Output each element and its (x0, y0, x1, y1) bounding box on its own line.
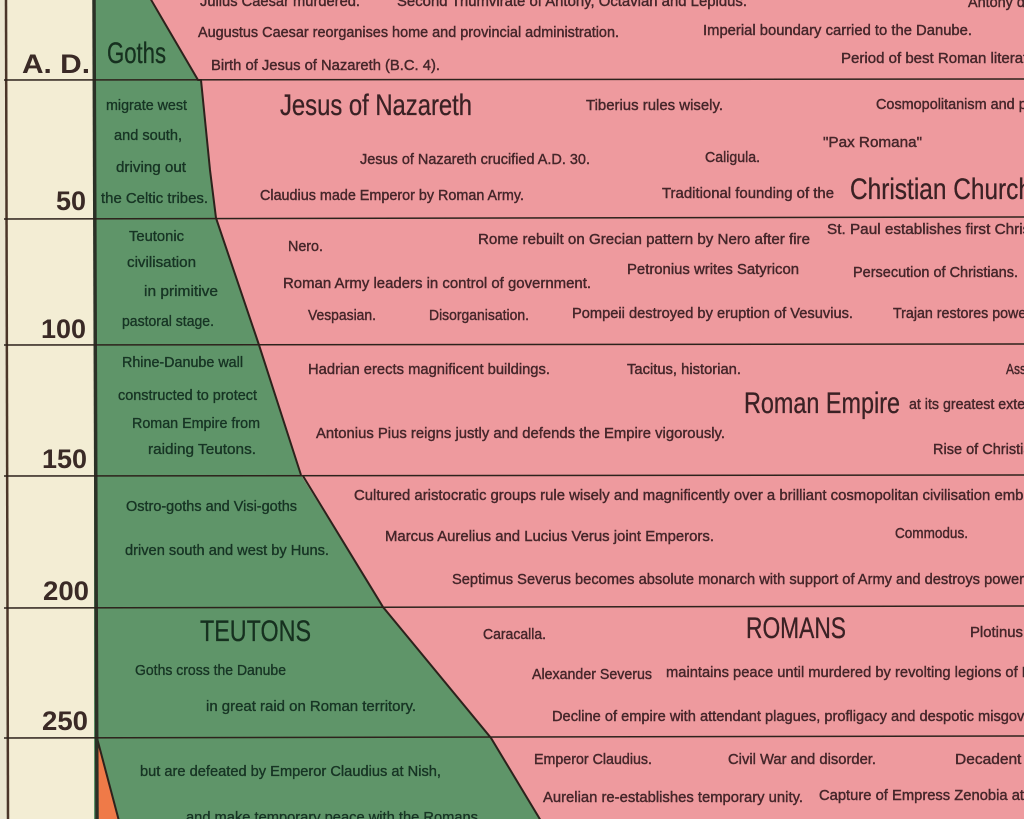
text block: Teutons events: the Celtic tribes. (101, 191, 208, 207)
text block: Teutons events: pastoral stage. (122, 314, 214, 330)
year axis labels: 100 (41, 314, 86, 344)
text block: Romans events: Rome rebuilt on Grecian pattern by Nero after fire (478, 232, 810, 248)
text block: Romans events: Persecution of Christians. (853, 265, 1018, 281)
text block: Romans events: Traditional founding of the (662, 186, 834, 202)
heading: Roman Empire: Roman Empire (744, 387, 900, 420)
text block: Teutons events: Ostro-goths and Visi-goths (126, 499, 297, 515)
text block: Teutons events: in primitive (144, 284, 218, 300)
year axis labels: A. D. (22, 49, 90, 79)
text block: Teutons events: Rhine-Danube wall (122, 355, 243, 371)
text block: Romans events: Pompeii destroyed by eruption of Vesuvius. (572, 306, 853, 322)
text block: Romans events: Birth of Jesus of Nazareth (B.C. 4). (211, 58, 440, 74)
text block: Romans events: Antonius Pius reigns justly and defends the Empire vigorously. (316, 426, 725, 442)
text block: Romans events: Plotinus (970, 625, 1023, 641)
text block: Teutons events: in great raid on Roman territory. (206, 699, 416, 715)
panel: timeline column (0, 0, 94, 819)
text block: Romans events: Claudius made Emperor by Roman Army. (260, 188, 524, 204)
text block: Romans events (198, 0, 1024, 806)
text block: Teutons events: constructed to protect (118, 388, 257, 404)
text block: Teutons events: raiding Teutons. (148, 442, 256, 458)
text block: Romans events: Jesus of Nazareth crucified A.D. 30. (360, 152, 590, 168)
panel: Teutons band (94, 0, 541, 819)
heading: Jesus of Nazareth: Jesus of Nazareth (280, 89, 472, 122)
year axis labels (22, 49, 90, 736)
text block: Romans events: Roman Army leaders in control of government. (283, 276, 591, 292)
heading: ROMANS: ROMANS (746, 612, 846, 645)
text block: Romans events: Septimus Severus becomes absolute monarch with support of Army and destroys power (452, 572, 1024, 588)
text block: Romans events: Imperial boundary carried to the Danube. (703, 23, 972, 39)
text block: Romans events: Civil War and disorder. (728, 752, 876, 768)
text block: Teutons events: driven south and west by Huns. (125, 543, 329, 559)
text block: Romans events: Augustus Caesar reorganises home and provincial administration. (198, 25, 619, 41)
text block: Teutons events: Teutonic (129, 229, 184, 245)
heading: TEUTONS: TEUTONS (200, 615, 311, 648)
text block: Romans events: Disorganisation. (429, 308, 529, 324)
text block: Romans events: Alexander Severus (532, 667, 652, 683)
text block: Romans events: Commodus. (895, 526, 968, 542)
text block: Teutons events: but are defeated by Emperor Claudius at Nish, (140, 764, 441, 780)
heading: Goths: Goths (107, 37, 166, 70)
text block: Romans events: Petronius writes Satyricon (627, 262, 799, 278)
year axis labels: 250 (42, 706, 88, 736)
text block: Romans events: Aurelian re-establishes temporary unity. (543, 790, 803, 806)
text block: Romans events: Caligula. (705, 150, 760, 166)
text block: Romans events: Tacitus, historian. (627, 362, 741, 378)
text block: Romans events: Marcus Aurelius and Lucius Verus joint Emperors. (385, 529, 714, 545)
text block: Teutons events (101, 98, 478, 819)
text block: Romans events: Hadrian erects magnificent buildings. (308, 362, 550, 378)
panel: Huns orange wedge (97, 740, 119, 819)
text block: Romans events: Caracalla. (483, 627, 546, 643)
text block: Teutons events: driving out (116, 160, 186, 176)
year axis labels: 150 (42, 444, 87, 474)
text block: Teutons events: Goths cross the Danube (135, 663, 286, 679)
text block: Romans events: "Pax Romana" (823, 135, 922, 151)
text block: Romans events: Emperor Claudius. (534, 752, 652, 768)
text block: Romans events: Nero. (288, 239, 323, 255)
text block: Romans events: Tiberius rules wisely. (586, 98, 723, 114)
text block: Teutons events: migrate west (106, 98, 187, 114)
text block: Romans events: Capture of Empress Zenobia at (819, 788, 1024, 804)
year axis labels: 200 (43, 576, 89, 606)
text block: Teutons events: civilisation (127, 255, 196, 271)
text block: Teutons events: Roman Empire from (132, 416, 260, 432)
year axis labels: 50 (56, 186, 86, 216)
text block: Romans events: Vespasian. (308, 308, 376, 324)
text block: Teutons events: and south, (114, 128, 182, 144)
